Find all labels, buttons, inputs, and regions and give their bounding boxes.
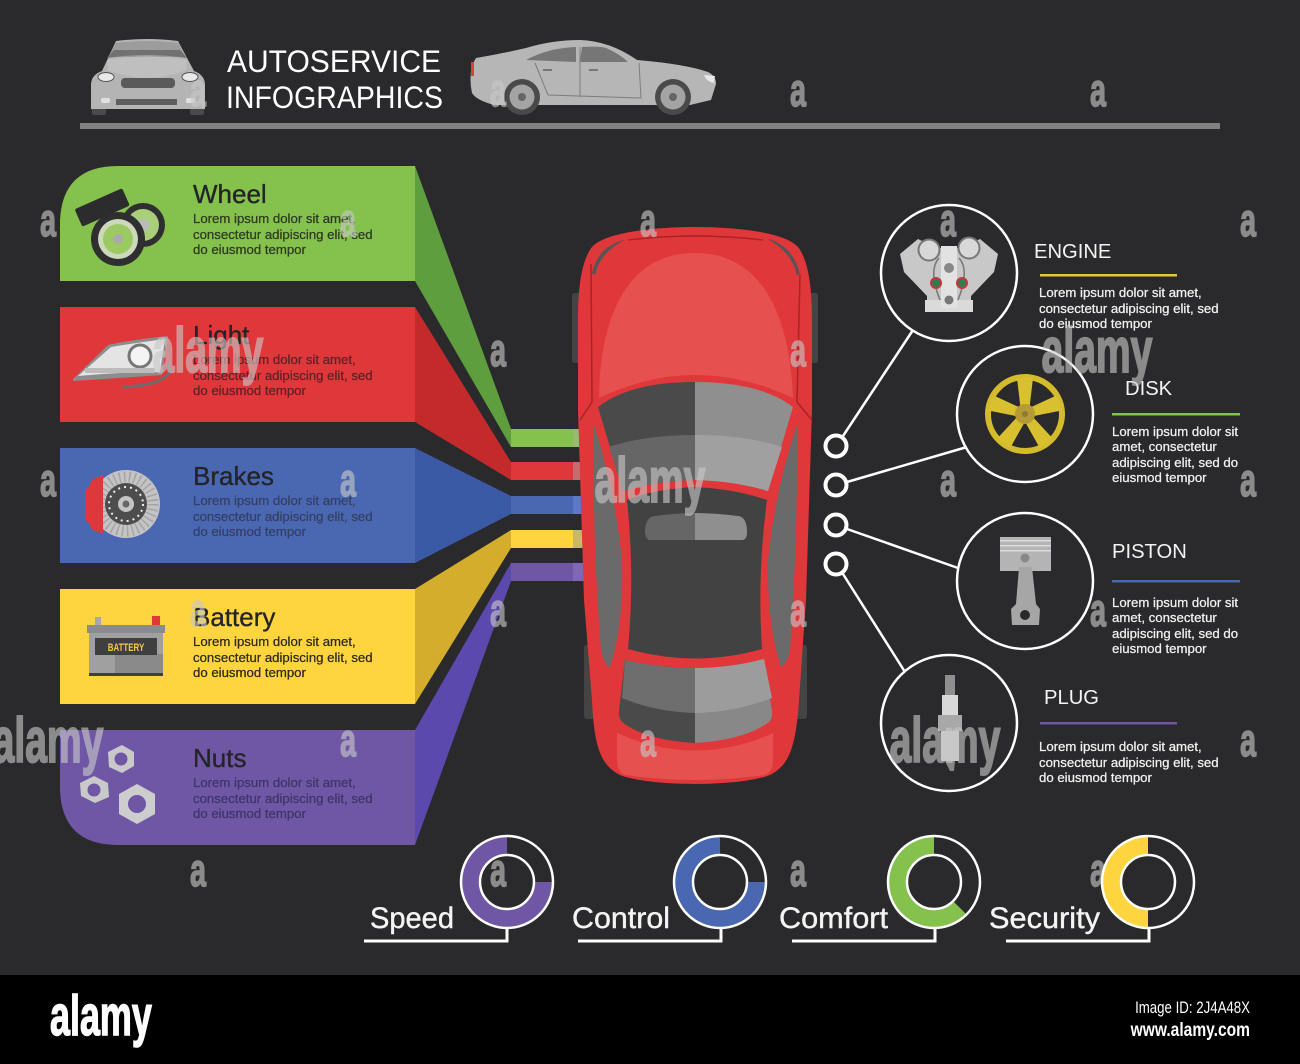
text: disk [1112, 424, 1238, 485]
heading: nuts: Nuts [193, 743, 246, 773]
watermark: a [640, 715, 656, 767]
heading: light: Light [193, 320, 250, 350]
part: disk [957, 346, 1240, 485]
watermark: a [490, 845, 506, 897]
icon: tires [75, 188, 165, 266]
text: plug: Lorem ipsum dolor sit amet, [1039, 739, 1202, 754]
icon: front view car [91, 39, 205, 115]
icon: alloy wheel [988, 377, 1062, 451]
text: brakes [193, 493, 373, 539]
icon: battery [87, 616, 165, 676]
title: INFOGRAPHICS [226, 79, 443, 115]
watermark: a [1090, 585, 1106, 637]
watermark: a [790, 325, 806, 377]
text: wheel: consectetur adipiscing elit, sed [193, 227, 373, 242]
part: plug [881, 655, 1219, 791]
watermark: a [1240, 715, 1256, 767]
panel: wheel [60, 166, 581, 447]
icon: nuts [80, 745, 155, 824]
watermark: a [40, 455, 56, 507]
text: plug: consectetur adipiscing elit, sed [1039, 755, 1219, 770]
part: piston [957, 513, 1240, 656]
heading: disk: DISK [1125, 378, 1173, 400]
title [226, 43, 443, 115]
text: battery: consectetur adipiscing elit, sed [193, 650, 373, 665]
text: disk: Lorem ipsum dolor sit [1112, 424, 1238, 439]
windshield [598, 382, 793, 491]
icon: brake disc [85, 470, 160, 538]
text: battery: Lorem ipsum dolor sit amet, [193, 634, 356, 649]
text: wheel: Lorem ipsum dolor sit amet, [193, 211, 356, 226]
icon: engine [900, 238, 998, 312]
watermark: a [340, 455, 356, 507]
gauge: speed [364, 836, 553, 941]
gauge: control [572, 836, 766, 941]
text: plug [1039, 739, 1219, 785]
text: piston: amet, consectetur [1112, 610, 1217, 625]
watermark behind security gauge: a [1090, 845, 1106, 897]
side windows [594, 425, 797, 667]
header [80, 39, 1220, 129]
icon: piston [1000, 537, 1051, 625]
watermark: a [340, 715, 356, 767]
watermark: a [940, 195, 956, 247]
watermark: a [790, 585, 806, 637]
panel: battery [60, 530, 584, 704]
watermark: a [790, 845, 806, 897]
watermark: a [190, 585, 206, 637]
watermark: a [1240, 455, 1256, 507]
watermark: alamy [595, 447, 705, 516]
text: piston [1112, 595, 1238, 656]
watermark: a [490, 585, 506, 637]
gauge: comfort [779, 836, 980, 941]
icon: battery: BATTERY [108, 642, 145, 654]
watermark: alamy [890, 707, 1000, 776]
watermark: a [1090, 65, 1106, 117]
heading: plug: PLUG [1044, 687, 1099, 709]
watermark: alamy [153, 317, 263, 386]
watermark: a [40, 195, 56, 247]
gauge: security: Security [989, 902, 1100, 935]
watermark: a [1240, 195, 1256, 247]
part: engine [881, 205, 1219, 341]
watermark: a [490, 65, 506, 117]
text: disk: eiusmod tempor [1112, 470, 1207, 485]
text: nuts: consectetur adipiscing elit, sed [193, 791, 373, 806]
footer bar [0, 975, 1300, 1064]
text: light: Lorem ipsum dolor sit amet, [193, 352, 356, 367]
icon: spark plug [938, 675, 962, 771]
text: brakes: do eiusmod tempor [193, 524, 306, 539]
gauge: comfort: Comfort [779, 902, 888, 935]
watermark: a [190, 845, 206, 897]
gauge: speed: Speed [370, 902, 454, 935]
text: piston: Lorem ipsum dolor sit [1112, 595, 1238, 610]
text: nuts: do eiusmod tempor [193, 806, 306, 821]
connector nodes and lines [826, 330, 967, 672]
text: engine: Lorem ipsum dolor sit amet, [1039, 285, 1202, 300]
icon: side view car [470, 40, 716, 115]
watermark: a [490, 325, 506, 377]
text: wheel: do eiusmod tempor [193, 242, 306, 257]
watermark [0, 65, 1256, 897]
text: nuts: Lorem ipsum dolor sit amet, [193, 775, 356, 790]
gauge: control: Control [572, 902, 670, 935]
watermark: alamy [1042, 317, 1152, 386]
text: engine: consectetur adipiscing elit, sed [1039, 301, 1219, 316]
watermark: a [940, 455, 956, 507]
text: wheel [193, 211, 373, 257]
text: engine [1039, 285, 1219, 331]
footer logo: alamy [50, 985, 152, 1048]
footer url: www.alamy.com [1130, 1019, 1250, 1040]
text: piston: eiusmod tempor [1112, 641, 1207, 656]
footer image id: Image ID: 2J4A48X [1135, 999, 1250, 1017]
text: light [193, 352, 373, 398]
icon: headlight [73, 336, 170, 387]
heading: brakes: Brakes [193, 461, 274, 491]
car top view [572, 227, 818, 784]
rear-view mirror [645, 513, 747, 540]
text: brakes: consectetur adipiscing elit, sed [193, 509, 373, 524]
watermark: a [340, 195, 356, 247]
heading: piston: PISTON [1112, 541, 1187, 563]
text: disk: amet, consectetur [1112, 439, 1217, 454]
roof [627, 487, 767, 658]
text: disk: adipiscing elit, sed do [1112, 455, 1238, 470]
heading: battery: Battery [193, 602, 275, 632]
text: light: consectetur adipiscing elit, sed [193, 368, 373, 383]
panel: brakes [60, 448, 582, 563]
title: AUTOSERVICE [227, 43, 441, 79]
hood lines and headlights [580, 236, 812, 420]
text: brakes: Lorem ipsum dolor sit amet, [193, 493, 356, 508]
text: piston: adipiscing elit, sed do [1112, 626, 1238, 641]
text: plug: do eiusmod tempor [1039, 770, 1152, 785]
heading: engine: ENGINE [1034, 241, 1111, 263]
text: engine: do eiusmod tempor [1039, 316, 1152, 331]
panel: nuts [60, 563, 585, 845]
watermark: a [790, 65, 806, 117]
header rule [80, 123, 1220, 129]
watermark: a [640, 195, 656, 247]
text: battery: do eiusmod tempor [193, 665, 306, 680]
watermark: a [190, 65, 206, 117]
text: light: do eiusmod tempor [193, 383, 306, 398]
text: nuts [193, 775, 373, 821]
text: battery [193, 634, 373, 680]
rear window [619, 659, 772, 743]
panel: light [60, 307, 582, 480]
heading: wheel: Wheel [193, 179, 267, 209]
gauge: security [989, 836, 1194, 941]
